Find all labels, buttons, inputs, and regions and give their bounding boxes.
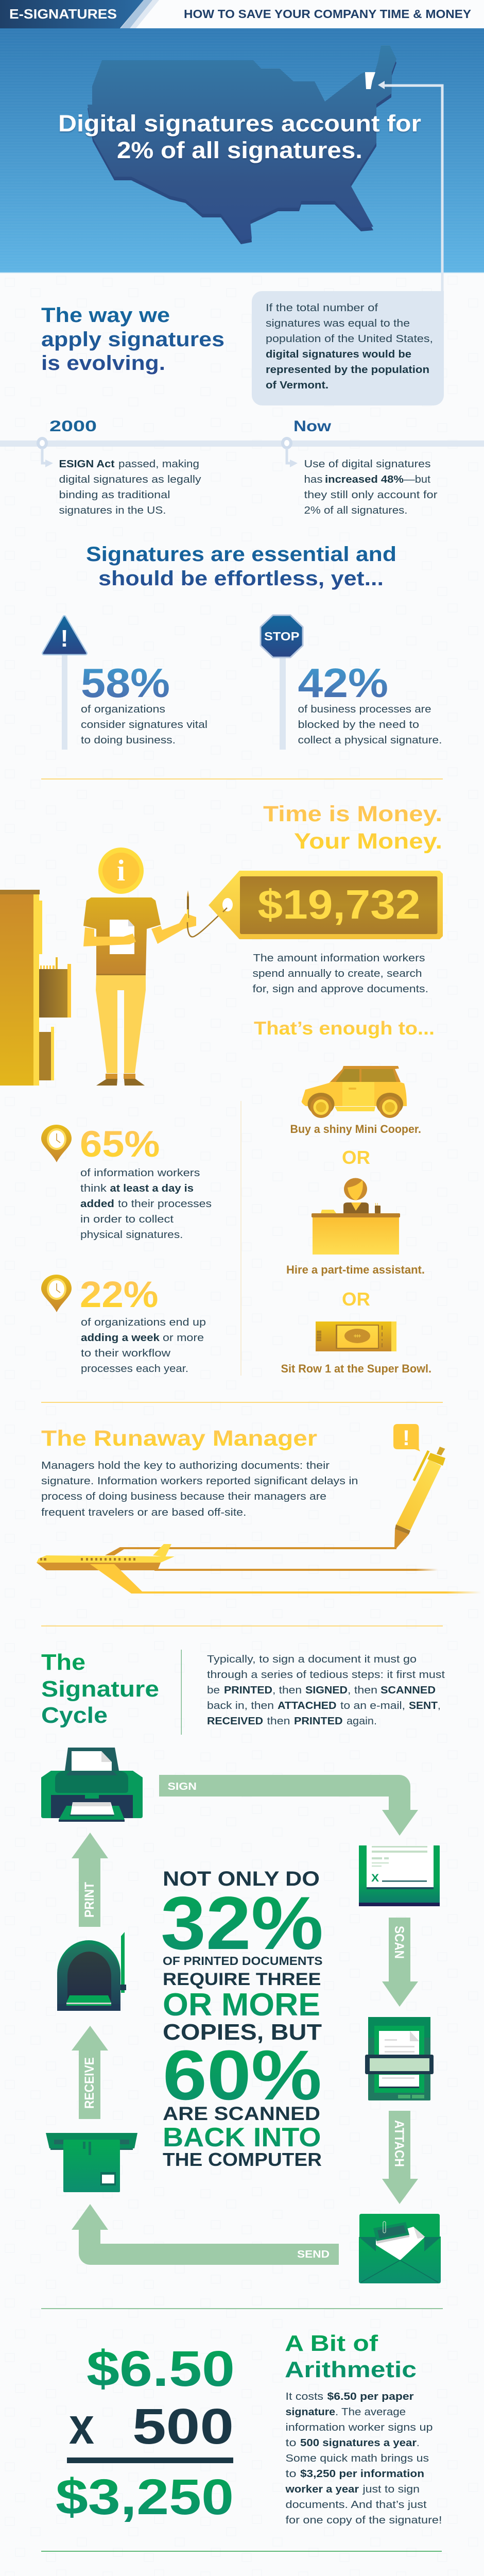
body text: frequent travelers or are based off-site. bbox=[41, 1506, 246, 1518]
stat: 58%: of organizations bbox=[81, 703, 165, 715]
body text: to bbox=[285, 2468, 297, 2480]
body text: to bbox=[285, 2437, 297, 2449]
callout: Vermont bbox=[252, 291, 444, 405]
description: adding a week bbox=[81, 1332, 160, 1344]
heading: Your Money. bbox=[294, 829, 442, 854]
arrow: send: SEND bbox=[297, 2249, 330, 2260]
stat: 58% bbox=[81, 660, 208, 746]
timeline entry: 2000 bbox=[49, 418, 201, 516]
panel: stat 22% bbox=[41, 1275, 206, 1375]
callout: Vermont: digital signatures would be bbox=[266, 348, 411, 360]
heading: Signature bbox=[41, 1676, 159, 1702]
timeline entry: now: Now bbox=[293, 418, 332, 435]
icon: speech bubble: ! bbox=[403, 1426, 410, 1450]
panel: what the money buys bbox=[281, 1066, 431, 1375]
body text: $3,250 per information bbox=[300, 2468, 424, 2480]
heading: Arithmetic bbox=[285, 2357, 417, 2382]
callout: central statistics: BACK INTO bbox=[163, 2123, 321, 2153]
description: physical signatures. bbox=[80, 1229, 183, 1241]
heading bbox=[41, 304, 224, 375]
illustration: person with i-head bbox=[83, 848, 196, 1086]
callout: central statistics: THE COMPUTER bbox=[163, 2149, 322, 2170]
panel: a bit of arithmetic bbox=[56, 2331, 442, 2526]
arrow: print: PRINT bbox=[82, 1882, 97, 1918]
callout: central statistics bbox=[161, 1868, 323, 2170]
heading: Cycle bbox=[41, 1703, 108, 1728]
illustration: person with i-head: i bbox=[117, 854, 125, 887]
callout: Vermont: signatures was equal to the bbox=[266, 317, 410, 329]
heading bbox=[263, 802, 442, 854]
stat: 58%: consider signatures vital bbox=[81, 719, 208, 731]
header tag: E-SIGNATURES bbox=[9, 6, 117, 22]
icon: Mini Cooper bbox=[302, 1066, 407, 1118]
timeline entry: 2000: binding as traditional bbox=[59, 489, 170, 501]
callout: Vermont: population of the United States, bbox=[266, 333, 433, 345]
heading: A Bit of bbox=[285, 2331, 378, 2356]
panel: signatures are essential bbox=[44, 543, 442, 750]
stat: 42%: of business processes are bbox=[298, 703, 431, 715]
calculation: $3,250 bbox=[56, 2469, 234, 2525]
panel: hero with US map bbox=[0, 28, 484, 291]
stat: 42% bbox=[298, 660, 442, 746]
body text: signature. Information workers reported significant delays in bbox=[41, 1475, 358, 1487]
body text: It costs bbox=[285, 2391, 323, 2402]
panel: header bar bbox=[0, 0, 484, 28]
heading bbox=[41, 1650, 159, 1728]
body text: information worker signs up bbox=[285, 2421, 433, 2433]
calculation: $6.50 bbox=[87, 2341, 235, 2397]
description: to their processes bbox=[118, 1198, 212, 1210]
body text: worker a year bbox=[285, 2483, 359, 2495]
arrow: receive: RECEIVE bbox=[82, 2057, 97, 2109]
arrow: attach bbox=[382, 2111, 418, 2204]
arrow: scan bbox=[382, 1918, 418, 2007]
icon: mailbox bbox=[57, 1932, 126, 2011]
description: PRINTED bbox=[224, 1684, 272, 1696]
icon: warning sign bbox=[44, 617, 85, 750]
heading: apply signatures bbox=[41, 328, 224, 351]
description: then bbox=[267, 1715, 290, 1727]
description: The amount information workers bbox=[253, 952, 425, 964]
icon: stop sign bbox=[261, 615, 303, 750]
timeline entry: 2000: ESIGN Act bbox=[59, 458, 115, 470]
callout: Vermont: represented by the population bbox=[266, 364, 429, 376]
icon: printer bbox=[41, 1748, 143, 1822]
icon: scanner bbox=[365, 2017, 434, 2100]
callout: central statistics: OF PRINTED DOCUMENTS bbox=[163, 1954, 322, 1968]
arrow: sign bbox=[159, 1775, 418, 1836]
callout: central statistics: OR MORE bbox=[163, 1987, 320, 2023]
body text: documents. And that’s just bbox=[285, 2499, 427, 2511]
heading: should be effortless, yet... bbox=[98, 567, 384, 590]
price tag: $19,732: $19,732 bbox=[257, 882, 420, 927]
description: added bbox=[80, 1198, 114, 1210]
heading: Signatures are essential and bbox=[86, 543, 396, 566]
description: or more bbox=[163, 1332, 204, 1344]
description: in order to collect bbox=[80, 1213, 174, 1225]
icon: signed document: X bbox=[371, 1872, 379, 1884]
body text: 500 signatures a year bbox=[300, 2437, 417, 2449]
description bbox=[252, 952, 428, 995]
arrow: scan: SCAN bbox=[392, 1926, 406, 1959]
hero headline: 2% of all signatures. bbox=[117, 137, 362, 163]
price tag: $19,732 bbox=[187, 871, 443, 939]
panel: evolving signatures bbox=[0, 291, 484, 516]
stat: 58%: to doing business. bbox=[81, 734, 176, 746]
body text: Some quick math brings us bbox=[285, 2452, 429, 2464]
callout: Vermont: If the total number of bbox=[266, 302, 378, 314]
icon: warning sign: ! bbox=[60, 625, 68, 652]
arrow pointing to Vermont bbox=[378, 81, 442, 291]
description: to their workflow bbox=[81, 1347, 170, 1359]
timeline entry: 2000: passed, making bbox=[118, 458, 199, 470]
timeline entry: now: Use of digital signatures bbox=[304, 458, 430, 470]
header title: HOW TO SAVE YOUR COMPANY TIME & MONEY bbox=[184, 7, 471, 21]
description: think bbox=[80, 1182, 107, 1194]
calculation: 500 bbox=[132, 2398, 234, 2454]
description: through a series of tedious steps: it first must bbox=[207, 1669, 445, 1681]
description bbox=[80, 1167, 212, 1241]
arrow: attach: ATTACH bbox=[392, 2120, 406, 2167]
heading bbox=[285, 2331, 417, 2382]
callout: central statistics: ARE SCANNED bbox=[163, 2103, 320, 2124]
stat: 42%: blocked by the need to bbox=[298, 719, 419, 731]
panel: what the money buys: Sit Row 1 at the Super Bowl. bbox=[281, 1362, 431, 1375]
illustration: filing cabinet bbox=[0, 890, 71, 1086]
stat: 42%: 42% bbox=[298, 660, 388, 706]
description: spend annually to create, search bbox=[252, 968, 422, 979]
callout: central statistics: 60% bbox=[163, 2036, 322, 2115]
description: SIGNED bbox=[305, 1684, 348, 1696]
body text: Managers hold the key to authorizing documents: their bbox=[41, 1460, 330, 1471]
description: of information workers bbox=[80, 1167, 200, 1179]
body text bbox=[285, 2391, 442, 2526]
panel: stat 22%: 22% bbox=[80, 1275, 159, 1315]
callout: Vermont: of Vermont. bbox=[266, 379, 329, 391]
panel: time is money bbox=[0, 802, 443, 1086]
arrow: sign: SIGN bbox=[168, 1781, 197, 1792]
description: processes each year. bbox=[81, 1363, 188, 1375]
icon: envelope with attachment bbox=[359, 2214, 441, 2283]
timeline entry: now: 2% of all signatures. bbox=[304, 504, 408, 516]
description: again. bbox=[347, 1715, 377, 1727]
stat: 42%: collect a physical signature. bbox=[298, 734, 442, 746]
panel: what the money buys: OR bbox=[342, 1289, 370, 1310]
icon: received letter bbox=[46, 2133, 137, 2192]
heading: The way we bbox=[41, 304, 170, 327]
arrow: receive bbox=[72, 2026, 108, 2119]
icon: Super Bowl ticket bbox=[316, 1321, 396, 1351]
heading: The bbox=[41, 1650, 85, 1675]
icon: clock pin bbox=[41, 1275, 72, 1312]
description: of organizations end up bbox=[81, 1316, 206, 1328]
timeline entry: now: they still only account for bbox=[304, 489, 438, 501]
arrow: send bbox=[72, 2204, 339, 2265]
icon: signed document bbox=[359, 1845, 440, 1906]
description bbox=[207, 1653, 445, 1727]
hero headline: Digital signatures account for bbox=[58, 110, 421, 137]
description: at least a day is bbox=[110, 1182, 194, 1194]
timeline entry: 2000: 2000 bbox=[49, 418, 97, 435]
timeline entry: now: has bbox=[304, 473, 322, 485]
panel: what the money buys: Hire a part-time assistant. bbox=[286, 1263, 425, 1276]
body text: . bbox=[417, 2437, 420, 2449]
callout: central statistics: REQUIRE THREE bbox=[163, 1970, 321, 1989]
description: Typically, to sign a document it must go bbox=[207, 1653, 417, 1665]
body text: signature bbox=[285, 2406, 335, 2418]
description: to an e-mail, bbox=[340, 1700, 405, 1711]
icon: stop sign: STOP bbox=[264, 630, 300, 643]
description: be bbox=[207, 1684, 220, 1696]
body text bbox=[41, 1460, 358, 1518]
description: for, sign and approve documents. bbox=[252, 983, 428, 995]
panel: the runaway manager bbox=[37, 1424, 481, 1594]
map of the United States bbox=[88, 45, 396, 244]
description bbox=[81, 1316, 206, 1375]
timeline entry: now: —but bbox=[404, 473, 430, 485]
panel: what the money buys: OR bbox=[342, 1147, 370, 1168]
timeline bbox=[0, 437, 484, 467]
timeline entry: now bbox=[293, 418, 438, 516]
description: , then bbox=[348, 1684, 377, 1696]
subheading: That’s enough to... bbox=[254, 1018, 435, 1039]
panel: what the money buys: Buy a shiny Mini Cooper. bbox=[290, 1123, 421, 1136]
icon: clock pin bbox=[41, 1125, 72, 1162]
stat: 58%: 58% bbox=[81, 660, 170, 706]
callout: central statistics: COPIES, BUT bbox=[163, 2020, 322, 2045]
body text: for one copy of the signature! bbox=[285, 2514, 442, 2526]
hero headline bbox=[58, 110, 421, 163]
description: back in, then bbox=[207, 1700, 274, 1711]
arrow: print bbox=[72, 1833, 108, 1927]
calculation: x bbox=[69, 2397, 94, 2455]
icon: speech bubble bbox=[393, 1424, 420, 1451]
callout: central statistics: NOT ONLY DO bbox=[163, 1868, 320, 1890]
panel: the signature cycle bbox=[41, 1650, 445, 2283]
body text: . The average bbox=[335, 2406, 406, 2418]
heading: The Runaway Manager bbox=[41, 1426, 317, 1451]
description: PRINTED bbox=[294, 1715, 343, 1727]
description: SCANNED bbox=[381, 1684, 436, 1696]
icon: pen bbox=[394, 1447, 445, 1548]
body text: process of doing business because their managers are bbox=[41, 1490, 326, 1502]
description: ATTACHED bbox=[278, 1700, 337, 1711]
description: SENT bbox=[409, 1700, 438, 1711]
heading bbox=[86, 543, 396, 590]
panel: stat 65% bbox=[41, 1124, 212, 1241]
description: , then bbox=[272, 1684, 302, 1696]
timeline entry: 2000: digital signatures as legally bbox=[59, 473, 201, 485]
description: RECEIVED bbox=[207, 1715, 263, 1727]
heading: is evolving. bbox=[41, 352, 165, 375]
icon: assistant at desk bbox=[312, 1178, 400, 1255]
calculation bbox=[56, 2341, 235, 2525]
timeline entry: now: increased 48% bbox=[325, 473, 404, 485]
description: , bbox=[438, 1700, 441, 1711]
heading: Time is Money. bbox=[263, 802, 442, 826]
illustration: plane with contrails bbox=[37, 1544, 481, 1594]
body text: $6.50 per paper bbox=[327, 2391, 414, 2402]
callout: central statistics: 32% bbox=[161, 1881, 323, 1965]
timeline entry: 2000: signatures in the US. bbox=[59, 504, 166, 516]
panel: stat 65%: 65% bbox=[80, 1124, 160, 1165]
body text: just to sign bbox=[362, 2483, 420, 2495]
